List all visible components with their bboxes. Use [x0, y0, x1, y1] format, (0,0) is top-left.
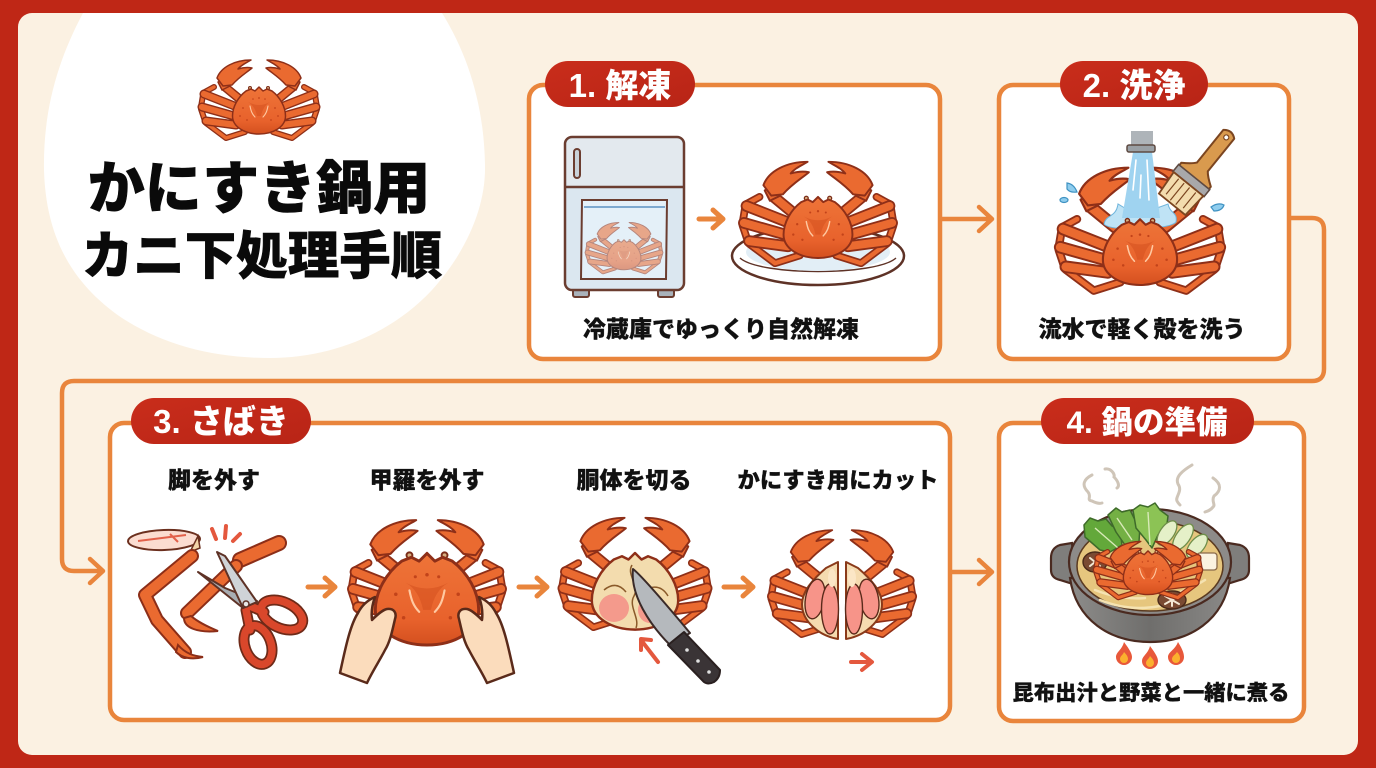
badge: 1: 1. 解凍: [569, 67, 671, 104]
sub-step: cut for kanisuki: かにすき用にカット: [738, 468, 938, 493]
sub-step: remove legs: [128, 467, 307, 668]
badge: 4: 4. 鍋の準備: [1066, 404, 1228, 440]
badge: 2: [1060, 61, 1208, 107]
panel: step 1 thaw: [529, 61, 940, 359]
icon: brush: [1157, 119, 1246, 217]
crab in pot: [1096, 552, 1200, 598]
sub-step: cut body: 胴体を切る: [576, 467, 692, 493]
tofu: [1197, 553, 1217, 570]
icon: halved crab: [771, 530, 913, 639]
arrow: substep 1 to 2: [308, 578, 335, 596]
sub-step: remove shell: 甲羅を外す: [370, 467, 484, 493]
icon: flames: [1116, 642, 1184, 669]
panel: step 3 prep: [110, 398, 950, 720]
icon: crab legs and meat: [128, 529, 279, 658]
title line 2: カニ下処理手順: [82, 214, 443, 289]
icon: steam: [1084, 465, 1220, 512]
icon: crab held by hands: [340, 520, 514, 683]
icon: open crab body: [562, 518, 708, 630]
sub-step: remove shell: [340, 467, 514, 683]
white title blob: [44, 13, 485, 358]
icon: snip marks: [212, 526, 240, 541]
arrow: cut direction: [641, 639, 658, 662]
badge: 4: [1041, 398, 1254, 444]
shiitake: [1083, 552, 1186, 609]
icon: fridge with frozen crab: [565, 137, 684, 297]
arrow: step 2 around to step 3: [62, 218, 1324, 583]
icon: scissors: [198, 552, 307, 668]
icon: thawed crab on plate: [732, 162, 904, 285]
icon: knife: [633, 569, 720, 684]
badge: 3: 3. さばき: [153, 403, 289, 440]
icon: title crab: [201, 60, 317, 138]
panel: step 4 pot: [999, 398, 1304, 721]
badge: 2: 2. 洗浄: [1083, 67, 1185, 104]
arrow: substep 2 to 3: [519, 578, 547, 596]
sub-step: cut body: [562, 467, 720, 684]
sub-step: cut for kanisuki: [738, 468, 938, 670]
caption: step 4: 昆布出汁と野菜と一緒に煮る: [1013, 680, 1289, 705]
arrow: step 3 to step 4: [951, 560, 992, 584]
arrow: cut direction right: [851, 654, 872, 670]
arrow: fridge to plate: [699, 210, 723, 228]
icon: crab under running water with brush: [1059, 119, 1246, 291]
arrow: substep 3 to 4: [724, 578, 753, 596]
arrow: step 1 to step 2: [942, 207, 992, 231]
icon: hot pot: [1051, 503, 1249, 642]
sub-step: remove legs: 脚を外す: [168, 467, 260, 493]
greens: [1084, 503, 1168, 552]
caption: step 1: 冷蔵庫でゆっくり自然解凍: [583, 316, 859, 342]
title line 1: かにすき鍋用: [88, 143, 430, 225]
badge: 3: [131, 398, 311, 444]
title area: [44, 13, 485, 358]
caption: step 2: 流水で軽く殻を洗う: [1038, 316, 1246, 342]
badge: 1: [545, 61, 695, 107]
panel: step 2 wash: [999, 61, 1289, 359]
